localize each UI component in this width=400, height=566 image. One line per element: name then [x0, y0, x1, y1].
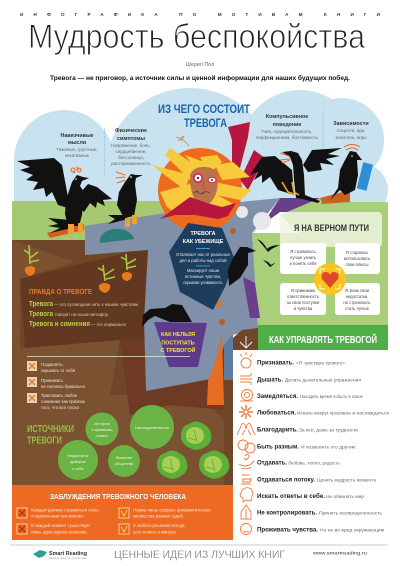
- footer logo: Smart Reading: [49, 551, 87, 557]
- column: addictions: Соцсети, еда,: [337, 128, 365, 133]
- truth about anxiety: — это нормально: [91, 322, 127, 327]
- item: do not control: [241, 505, 383, 519]
- hair rays: [152, 148, 252, 215]
- card: use strengths: Я стараюсь: [346, 250, 369, 255]
- item: breathe: Делать дыхательные упражнения: [285, 378, 362, 382]
- sources heading: ТРЕВОГИ: [27, 436, 62, 446]
- panel: misconceptions: множества разных судеб: [133, 514, 183, 518]
- crow 4 with tablet: [320, 144, 373, 204]
- author: Шерил Пол: [186, 62, 214, 68]
- column: physical symptoms: Напряжение, боль,: [111, 143, 151, 148]
- sources circles: [58, 405, 174, 480]
- panel: what not to do: ПОСТУПАТЬ: [161, 340, 195, 346]
- panel: misconceptions: ЗАБЛУЖДЕНИЯ ТРЕВОЖНОГО ЧЕЛОВЕКА: [50, 494, 186, 501]
- item: be grateful: Благодарить.: [257, 426, 298, 434]
- column: compulsive behaviour: перфекционизм, болтливость: [256, 135, 319, 140]
- column: intrusive thoughts: негативные: [65, 153, 90, 158]
- truth about anxiety: ПРАВДА О ТРЕВОГЕ: [29, 289, 92, 296]
- sources heading: ИСТОЧНИКИ: [27, 424, 74, 435]
- card: take responsibility: ответственность: [287, 294, 320, 299]
- item: admire: [239, 405, 390, 419]
- panel: misconceptions: лишь одно верное решение: [31, 530, 87, 534]
- list: what not to do: ее сигналы буквально: [41, 384, 86, 389]
- panel: shelter: КАК УБЕЖИЩЕ: [183, 239, 224, 245]
- list: what not to do: того, что все плохо: [41, 405, 80, 410]
- panel: shelter: истинные чувства,: [185, 274, 221, 279]
- sources circles: семьи: [96, 433, 108, 438]
- scarf tails: [228, 122, 265, 190]
- crow 1 on branch: [17, 158, 112, 238]
- item: answers within: Искать ответы в себе.: [257, 493, 325, 500]
- panel: shelter: дел и работы над собой: [180, 258, 227, 263]
- item: acknowledge: [240, 352, 346, 368]
- coat buttons and circles: [216, 198, 271, 325]
- truth about anxiety: говорит на языке метафор: [55, 312, 109, 317]
- column: compulsive behaviour: поведение: [273, 122, 301, 128]
- item: do not control: Принять неопределенность: [319, 510, 383, 516]
- card: know weaknesses: недостатки,: [346, 294, 368, 299]
- item: live feelings: Проживать чувства.: [257, 526, 318, 534]
- brown field panel: [12, 240, 224, 485]
- column: compulsive behaviour: Гнев, подозрительность,: [261, 129, 313, 134]
- column: addictions: Зависимости: [333, 121, 369, 127]
- cabbages: [157, 422, 229, 479]
- list: what not to do: скрывать от себя: [41, 368, 76, 373]
- column: intrusive thoughts: Тяжелые, грустные,: [56, 147, 98, 152]
- item: flow: [241, 475, 377, 484]
- card: take responsibility: за свои поступки: [287, 300, 320, 305]
- column: intrusive thoughts: Навязчивые: [60, 133, 94, 139]
- panel: what not to do: [154, 322, 207, 367]
- panel: what not to do: КАК НЕЛЬЗЯ: [161, 332, 195, 338]
- icon: down arrow box: [233, 328, 258, 350]
- column: intrusive thoughts: мысли: [68, 140, 86, 146]
- card: know weaknesses: [335, 283, 380, 315]
- column: physical symptoms: симптомы: [117, 136, 145, 142]
- small bird 2: [263, 260, 275, 267]
- column: addictions: алкоголь, игры: [336, 135, 366, 140]
- truth about anxiety: Тревога и сомнения: [29, 321, 90, 328]
- item: do not control: Не контролировать.: [257, 510, 317, 516]
- heading bar: how to manage: [258, 325, 388, 350]
- crow on purple box: [142, 304, 192, 327]
- card: use strengths: свои плюсы: [345, 262, 369, 267]
- scarecrow coat: [85, 198, 322, 405]
- item: slow down: [240, 390, 364, 401]
- straw wisp: [176, 136, 189, 146]
- item: live feelings: Но не во вред окружающим: [320, 528, 384, 532]
- carrots: [24, 245, 136, 293]
- footer logo: Ценные идеи из лучших книг: [49, 557, 87, 560]
- item: flow: Ценить мудрость момента: [317, 478, 377, 482]
- item: live feelings: [240, 524, 384, 534]
- icon: heart badge: [314, 263, 346, 295]
- panel: misconceptions: «нормальным человеком»: [31, 514, 85, 518]
- panel: shelter: ТРЕВОГА: [190, 231, 216, 237]
- nose and mouth: [203, 180, 206, 189]
- white list panel: [233, 350, 400, 540]
- item: give: [239, 454, 341, 469]
- item: be different: [238, 440, 355, 453]
- card: use strengths: использовать: [344, 256, 371, 261]
- crow 2: [108, 172, 143, 227]
- column: physical symptoms: бессонница,: [118, 155, 144, 160]
- header label: ИНФОГРАФИКА ПО МОТИВАМ КНИГИ: [20, 12, 380, 17]
- column: compulsive behaviour: [256, 114, 319, 140]
- item: answers within: [240, 488, 365, 502]
- hair disc: [158, 148, 242, 232]
- scarecrow head: [152, 148, 252, 232]
- cloud heading: ИЗ ЧЕГО СОСТОИТ: [158, 102, 251, 116]
- card: take responsibility: и чувства: [294, 306, 313, 311]
- item: acknowledge: «Я чувствую тревогу»: [296, 360, 346, 366]
- face: [190, 167, 218, 204]
- sources circles: История: [94, 421, 110, 426]
- column: addictions: [333, 121, 369, 140]
- truth about anxiety: — это путеводная нить к нашим чувствам: [54, 302, 138, 307]
- column: physical symptoms: Физические: [115, 128, 147, 134]
- teal coat patch: [100, 229, 134, 243]
- panel: misconceptions: Каждый должен стремиться стать: [31, 508, 100, 512]
- card: know myself: Я стремлюсь: [290, 249, 317, 254]
- panel: shelter: скрывая уязвимость: [183, 280, 224, 285]
- scarf collar: [160, 197, 236, 219]
- panel: shelter: Отвлекает нас от реальных: [176, 252, 231, 257]
- column: physical symptoms: сердцебиение,: [115, 149, 147, 154]
- card: use strengths: [335, 243, 380, 274]
- sources circles: и привычки: [91, 427, 113, 432]
- title: Мудрость беспокойства: [28, 18, 365, 56]
- green ground: [12, 201, 230, 245]
- panel: misconceptions: Норма лишь среднее арифметическое: [133, 508, 211, 512]
- panel: shelter: Маскирует наши: [187, 268, 220, 273]
- sources circles: Влияние: [116, 455, 133, 460]
- card: know myself: [280, 243, 326, 274]
- truth about anxiety: Тревога: [29, 311, 53, 318]
- cloud heading: [158, 102, 251, 130]
- panel: misconceptions: У любого решения всегда: [133, 523, 185, 528]
- list: how to manage: [237, 352, 390, 534]
- card: know myself: лучше узнать: [290, 255, 317, 260]
- panel: misconceptions: есть плюсы и минусы: [133, 530, 176, 534]
- card: take responsibility: [280, 283, 326, 315]
- sources circles: Недостаток: [67, 453, 89, 458]
- footer logo: [33, 550, 87, 560]
- item: be different: Быть разным.: [257, 444, 299, 450]
- list: what not to do: Подавлять,: [41, 362, 64, 367]
- panel: misconceptions: В каждый момент существует: [31, 523, 91, 528]
- right light green panel: [252, 202, 388, 350]
- truth about anxiety: [29, 289, 138, 328]
- sources circles: к себе: [72, 466, 85, 471]
- footer url: www.smartreading.ru: [313, 550, 367, 556]
- card: know weaknesses: но стремлюсь: [343, 300, 371, 305]
- card: on the right path: [280, 212, 382, 247]
- item: slow down: Находить время побыть в покое: [300, 394, 364, 399]
- item: admire: Искать вокруг красивое и наслаждаться: [297, 410, 390, 416]
- card: take responsibility: Я принимаю: [291, 288, 315, 293]
- subtitle: Тревога — не приговор, а источник силы и ценной информации для наших будущих побед.: [50, 75, 350, 82]
- small bird 1: [257, 239, 280, 252]
- card: know myself: и понять себя: [290, 261, 316, 266]
- crow on coat: [228, 247, 256, 286]
- item: give: Отдавать.: [257, 460, 287, 466]
- panel: what not to do: С ТРЕВОГОЙ: [161, 346, 196, 354]
- list: what not to do: Трактовать любое: [41, 393, 78, 398]
- item: be different: И позволять это другим: [301, 444, 355, 450]
- item: flow: Отдаваться потоку.: [257, 476, 315, 484]
- item: breathe: [240, 373, 362, 385]
- panel: shelter: [169, 223, 235, 310]
- sources circles: общества: [115, 461, 134, 466]
- column: physical symptoms: [111, 128, 151, 166]
- item: answers within: Не обвинять мир: [326, 494, 365, 499]
- card: on the right path: Я НА ВЕРНОМ ПУТИ: [294, 223, 369, 234]
- column: compulsive behaviour: Компульсивное: [266, 114, 308, 120]
- list: what not to do: сомнение как признак: [41, 399, 85, 404]
- item: give: Любовь, тепло, радость: [288, 460, 341, 466]
- eyes: [193, 173, 203, 183]
- sources circles: Наследственность: [135, 425, 169, 430]
- item: admire: Любоваться.: [257, 410, 296, 416]
- cloud heading: ТРЕВОГА: [184, 116, 227, 130]
- column: physical symptoms: расторможенность: [111, 161, 151, 166]
- item: acknowledge: Признавать.: [257, 360, 294, 366]
- card: know weaknesses: стать лучше: [345, 306, 370, 311]
- right strip: [224, 335, 233, 540]
- sources heading: [27, 424, 74, 446]
- panel: misconceptions: [12, 485, 224, 540]
- item: be grateful: [237, 423, 359, 435]
- cloud background: [14, 88, 388, 262]
- item: be grateful: За все, даже за трудности: [299, 428, 359, 432]
- item: slow down: Замедляться.: [257, 393, 298, 400]
- list: what not to do: [27, 361, 86, 410]
- list: what not to do: Принимать: [41, 378, 64, 383]
- footer slogan: ЦЕННЫЕ ИДЕИ ИЗ ЛУЧШИХ КНИГ: [114, 549, 285, 561]
- sources circles: доверия: [70, 459, 86, 464]
- item: breathe: Дышать.: [257, 376, 283, 384]
- card: know weaknesses: Я знаю свои: [345, 288, 370, 293]
- brown field patches: [12, 240, 224, 485]
- column: intrusive thoughts: [56, 133, 98, 158]
- truth about anxiety: Тревога: [29, 301, 53, 308]
- crow 3: [250, 148, 342, 203]
